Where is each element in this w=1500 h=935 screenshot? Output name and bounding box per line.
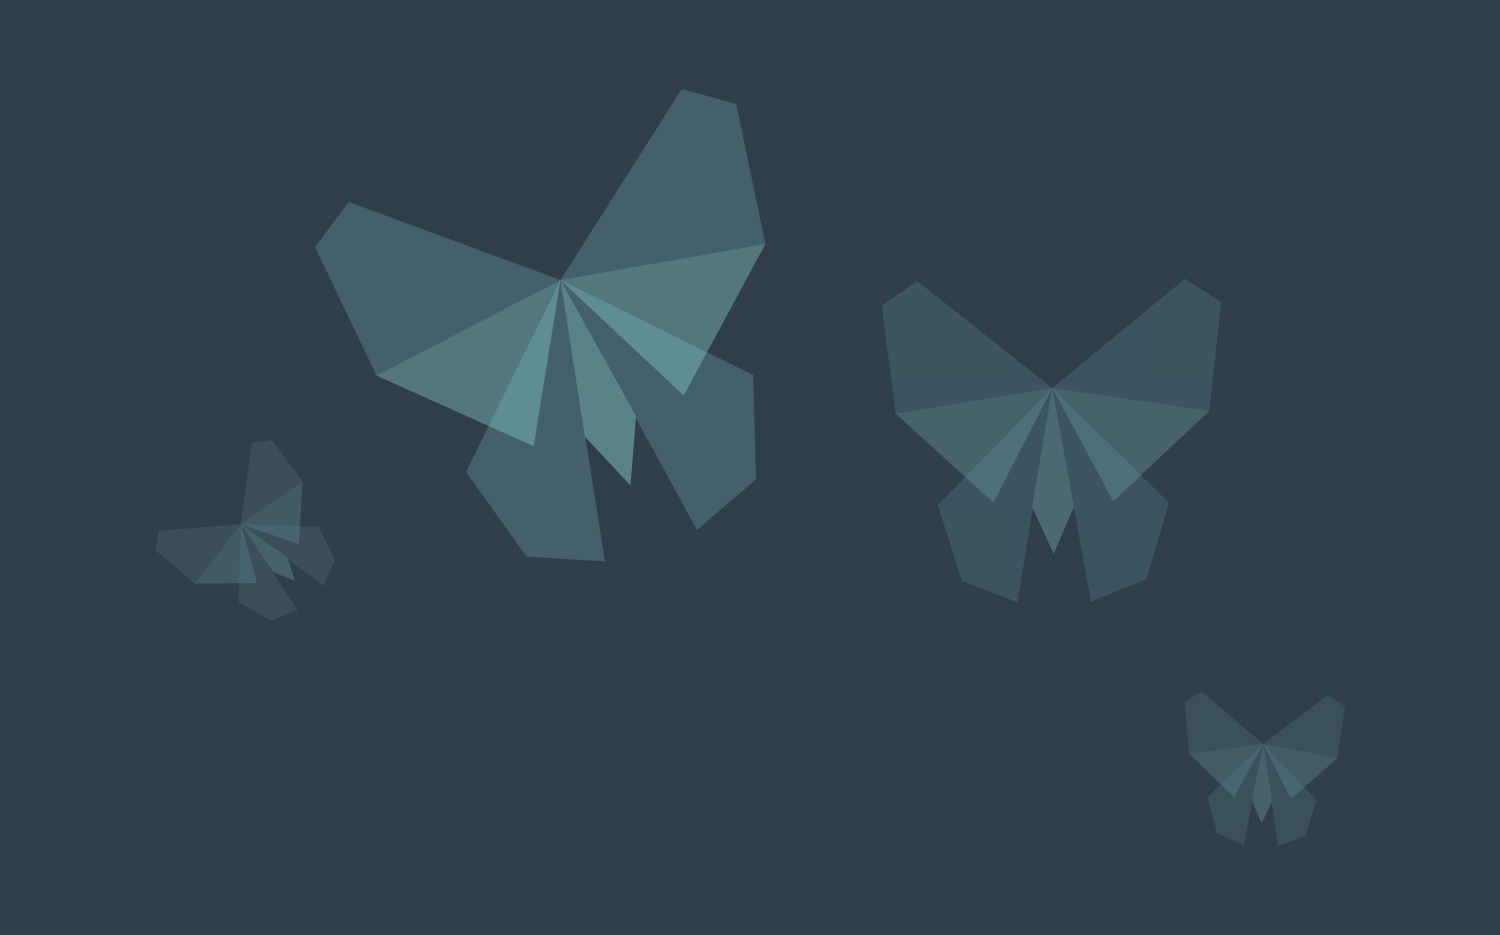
fore wing lower: small right, left side	[1189, 744, 1263, 797]
fore wing lower: small left, top	[241, 481, 303, 544]
butterfly: large centre-left	[315, 89, 765, 561]
fore wing upper: small left, top	[241, 440, 303, 524]
butterfly: small left	[155, 440, 335, 621]
body fold: small left	[241, 524, 295, 581]
fore wing lower: medium left	[896, 388, 1052, 503]
hind wing: large left	[466, 280, 605, 561]
body fold: large	[560, 280, 636, 486]
butterfly: small bottom right	[1184, 692, 1345, 846]
hind wing: small left, lower side	[239, 524, 298, 621]
butterfly: medium right	[882, 279, 1221, 602]
fore wing lower: large left	[377, 280, 560, 446]
fore wing upper: small right, right side	[1263, 695, 1345, 758]
body fold: medium	[1032, 388, 1074, 554]
fore wing lower: medium right	[1052, 388, 1209, 501]
fore wing upper: medium left	[882, 281, 1052, 414]
hind wing: small left, right side	[241, 524, 335, 586]
fore wing upper: small right, left side	[1184, 692, 1263, 754]
fore wing upper: medium right	[1052, 279, 1221, 411]
fore wing upper: large right	[560, 89, 765, 280]
fore wing upper: large left	[315, 202, 560, 376]
fore wing lower: large right	[560, 244, 765, 396]
fore wing upper: small left, side	[155, 524, 241, 584]
hind wing: small right, left side	[1207, 744, 1263, 845]
hind wing: medium left	[938, 388, 1052, 602]
fore wing lower: small right, right side	[1263, 744, 1338, 799]
body fold: small right	[1252, 744, 1272, 823]
fore wing lower: small left, side	[195, 524, 257, 584]
hind wing: small right, right side	[1263, 744, 1316, 846]
hind wing: large right	[560, 280, 756, 530]
hind wing: medium right	[1052, 388, 1169, 602]
